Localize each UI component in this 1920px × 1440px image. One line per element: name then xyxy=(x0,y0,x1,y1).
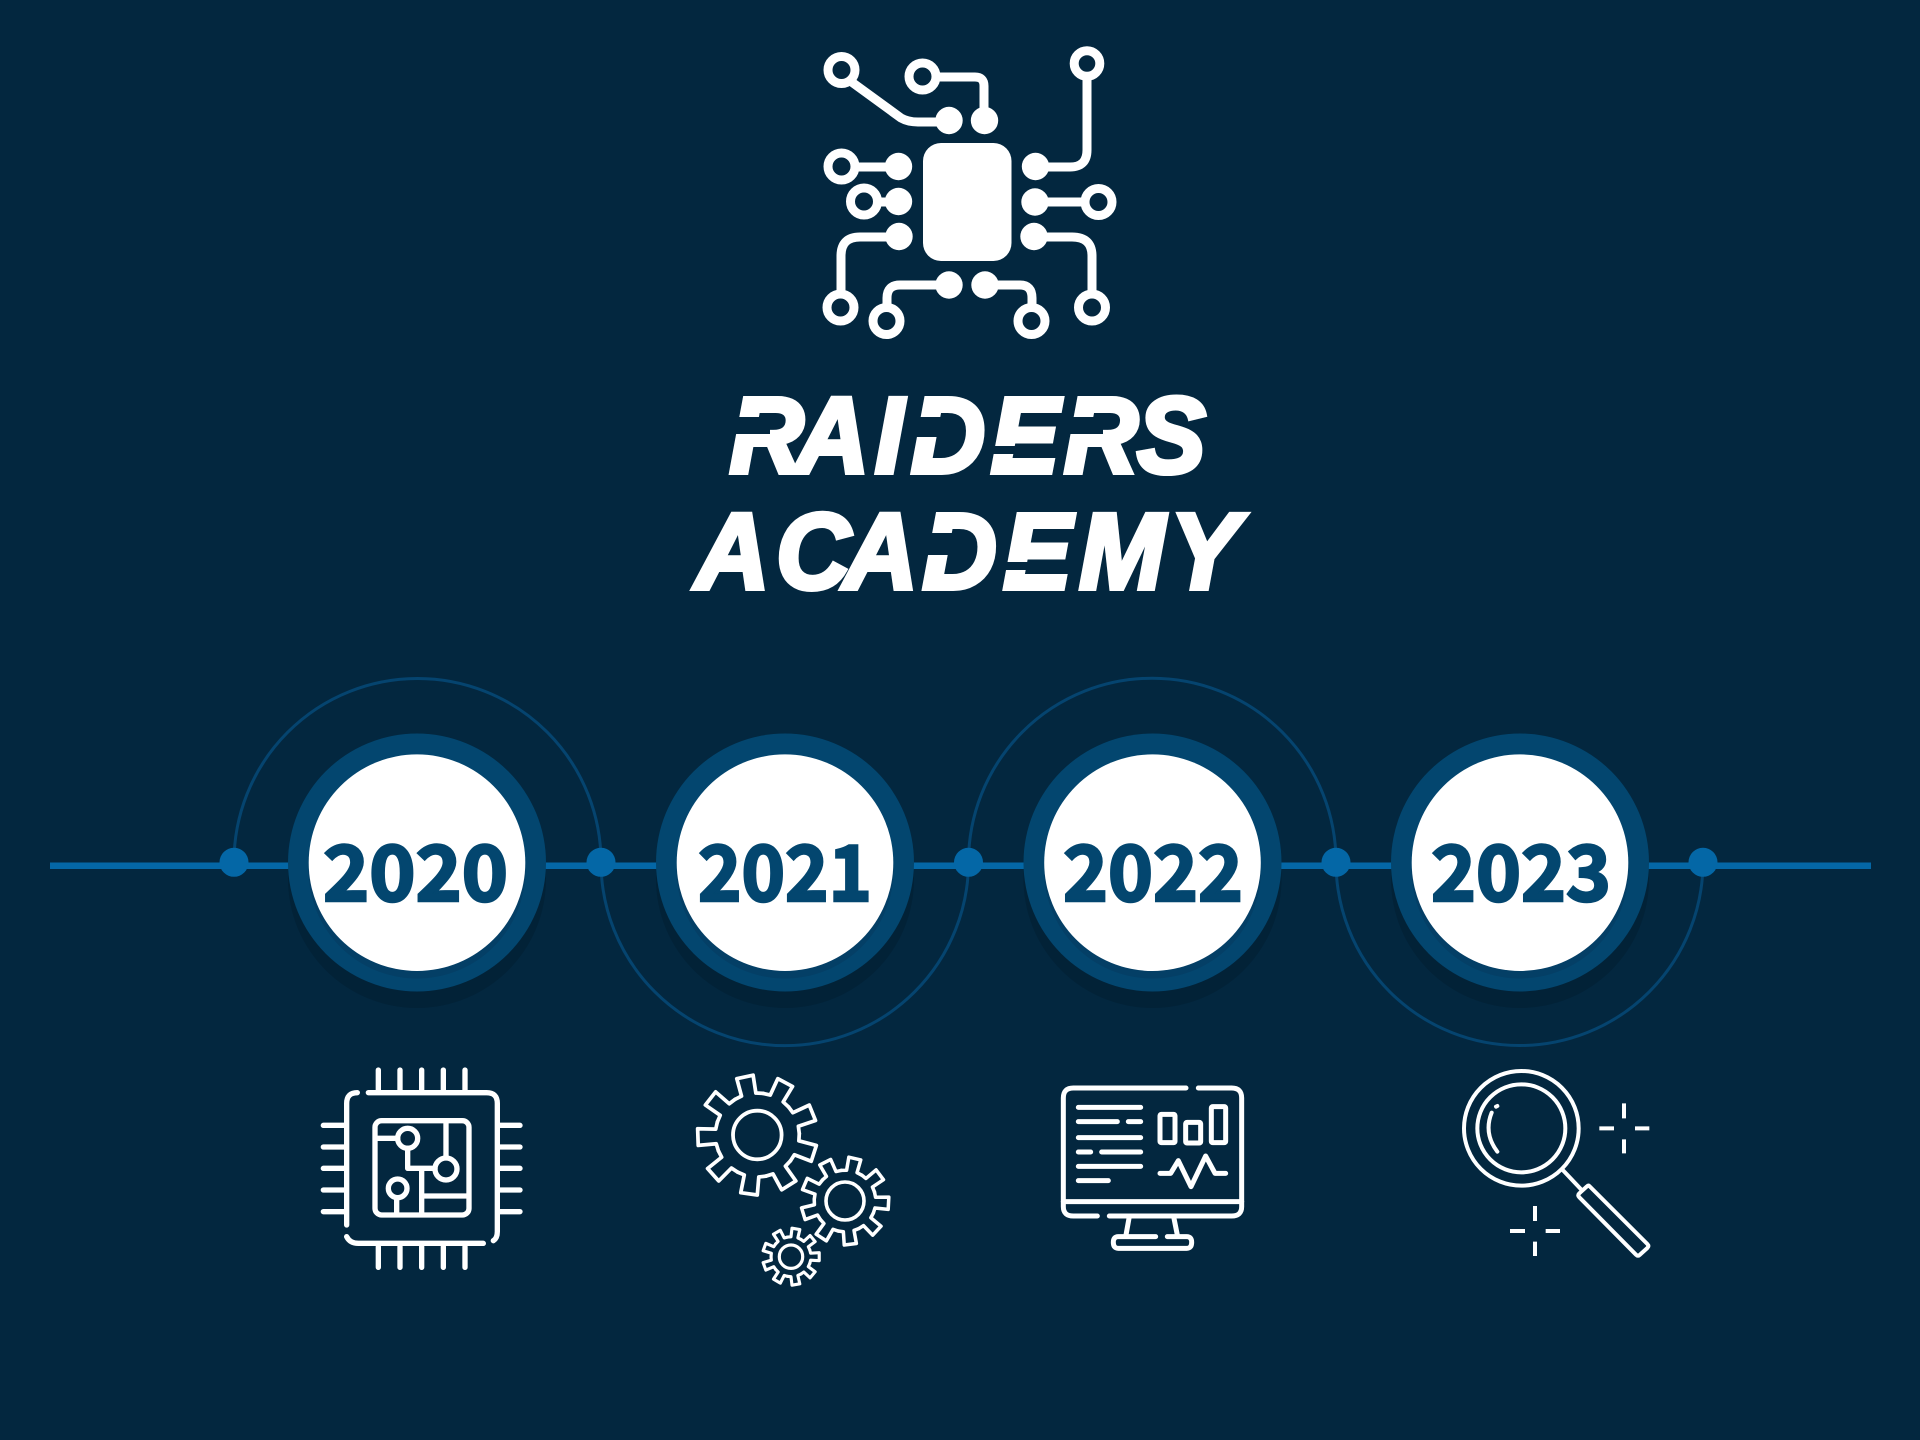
timeline dots xyxy=(220,848,1718,877)
connecting arcs xyxy=(234,678,1703,1046)
milestone: 2021: 2021 xyxy=(698,813,872,924)
milestone: 2023: 2023 xyxy=(1431,813,1611,924)
icon: magnifying glass xyxy=(1464,1071,1649,1256)
timeline line xyxy=(50,862,1871,869)
milestone: 2020: 2020 xyxy=(323,813,508,924)
milestone: 2020 xyxy=(288,734,546,1008)
milestone: 2023 xyxy=(1391,734,1649,1008)
icon: gears xyxy=(685,1064,891,1286)
milestone: 2022: 2022 xyxy=(1063,813,1243,924)
title: Raiders Academy: ACADEMY xyxy=(692,492,1247,612)
icon: monitor dashboard xyxy=(1063,1088,1242,1248)
milestone: 2022 xyxy=(1024,734,1282,1008)
icon: microchip xyxy=(323,1070,520,1267)
title: Raiders Academy: RAIDERS xyxy=(730,376,1206,496)
logo icon: circuit chip xyxy=(827,51,1112,334)
milestone: 2021 xyxy=(656,734,914,1008)
title: Raiders Academy xyxy=(692,376,1247,612)
